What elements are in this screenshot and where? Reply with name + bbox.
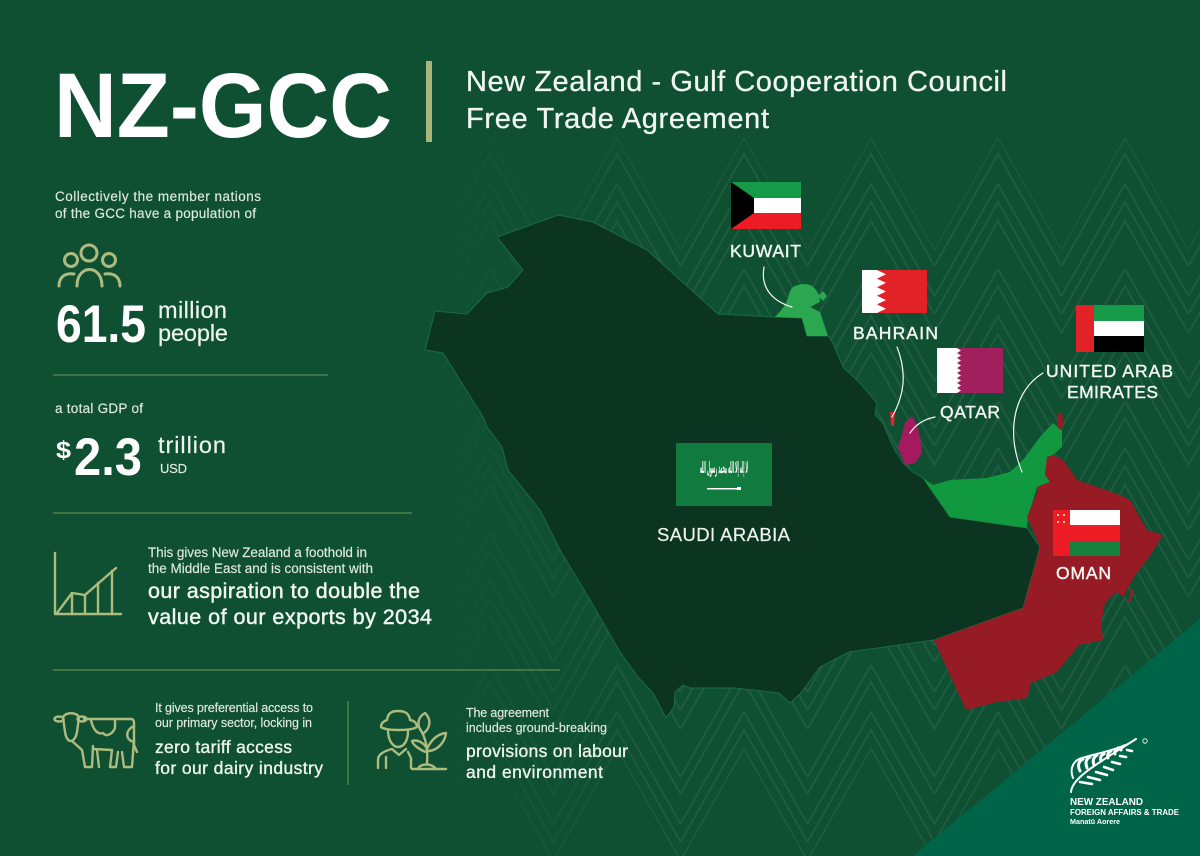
label: Qatar: QATAR [940,402,1000,422]
text: exports: This gives New Zealand a foothold in [148,545,367,560]
text: لا إله إلا الله محمد رسول الله [700,458,748,477]
title: New Zealand - Gulf Cooperation Council [466,66,1007,98]
stat: 61.5 million people [56,295,228,354]
text: labour: provisions on labour [466,741,628,761]
stat: 61.5 million people: people [158,320,228,346]
stat: 2.3 trillion USD: USD [160,461,187,476]
text: population intro: of the GCC have a population of [55,206,256,221]
stat: 61.5 million people: 61.5 [56,295,146,354]
country: United Arab Emirates [923,423,1062,528]
stat: 2.3 trillion USD: $ [56,437,72,464]
text: logo wordmark: Manatū Aorere [1070,817,1120,826]
country: Oman [934,412,1163,710]
icon: silver fern [1071,739,1147,792]
icon: line chart [55,553,121,614]
stat: 61.5 million people: million [158,297,227,323]
icon: people [59,245,120,286]
icon: farmer with plant [378,711,446,769]
flag: Oman [1053,510,1120,556]
icon: cow [54,713,137,767]
panel: labour and environment [378,706,628,782]
panel: population [55,189,261,354]
stat: 2.3 trillion USD: 2.3 [74,428,142,487]
text: dairy: zero tariff access [155,737,292,757]
country: Qatar [898,416,922,465]
text: exports: value of our exports by 2034 [148,605,432,629]
text: dairy [155,701,323,778]
text: logo wordmark: FOREIGN AFFAIRS & TRADE [1070,808,1180,817]
text: exports [148,545,432,629]
text: exports: the Middle East and is consistent with [148,561,373,576]
label: Oman: OMAN [1056,563,1111,583]
label: Bahrain: BAHRAIN [853,323,938,343]
corner panel [913,619,1200,856]
text: labour: and environment [466,762,603,782]
flag: Qatar [937,348,1003,393]
label: United Arab Emirates [1014,305,1173,472]
panel: GDP [55,401,226,487]
country: Saudi Arabia [425,215,1040,718]
panel: GDP: a total GDP of [55,401,143,416]
text: labour: The agreement [466,706,550,720]
text: labour [466,706,628,782]
label: Bahrain [853,270,938,417]
flag: Kuwait [731,182,801,229]
label: Saudi Arabia: SAUDI ARABIA [657,524,791,545]
text: exports: our aspiration to double the [148,579,420,603]
label: Qatar [910,348,1003,433]
title: NZ-GCC [54,55,392,157]
text: logo wordmark [1070,796,1180,826]
text: dairy: It gives preferential access to [155,701,313,715]
text: population intro [55,189,261,221]
flag: UAE [1076,305,1144,352]
text: dairy: for our dairy industry [155,758,323,778]
text: logo wordmark: NEW ZEALAND [1070,796,1143,808]
label: United Arab Emirates: EMIRATES [1067,382,1158,402]
country: Kuwait [775,284,828,336]
stat: 2.3 trillion USD [56,428,226,487]
logo: New Zealand Foreign Affairs and Trade [1070,739,1180,826]
title [54,55,1007,157]
flag: Bahrain [862,270,927,313]
text: labour: includes ground-breaking [466,721,607,735]
title: Free Trade Agreement [466,103,769,135]
label: Kuwait: KUWAIT [730,241,801,261]
label: Saudi Arabia [657,443,791,545]
text: population intro: Collectively the member nations [55,189,261,204]
label: Kuwait [730,182,801,307]
panel: exports aspiration [55,545,432,629]
country: Bahrain [890,412,895,426]
label: Oman [1053,510,1120,583]
text: dairy: our primary sector, locking in [155,716,312,730]
label: United Arab Emirates: UNITED ARAB [1046,361,1173,381]
stat: 2.3 trillion USD: trillion [158,432,226,458]
panel: dairy access [54,701,323,778]
map [425,215,1163,718]
